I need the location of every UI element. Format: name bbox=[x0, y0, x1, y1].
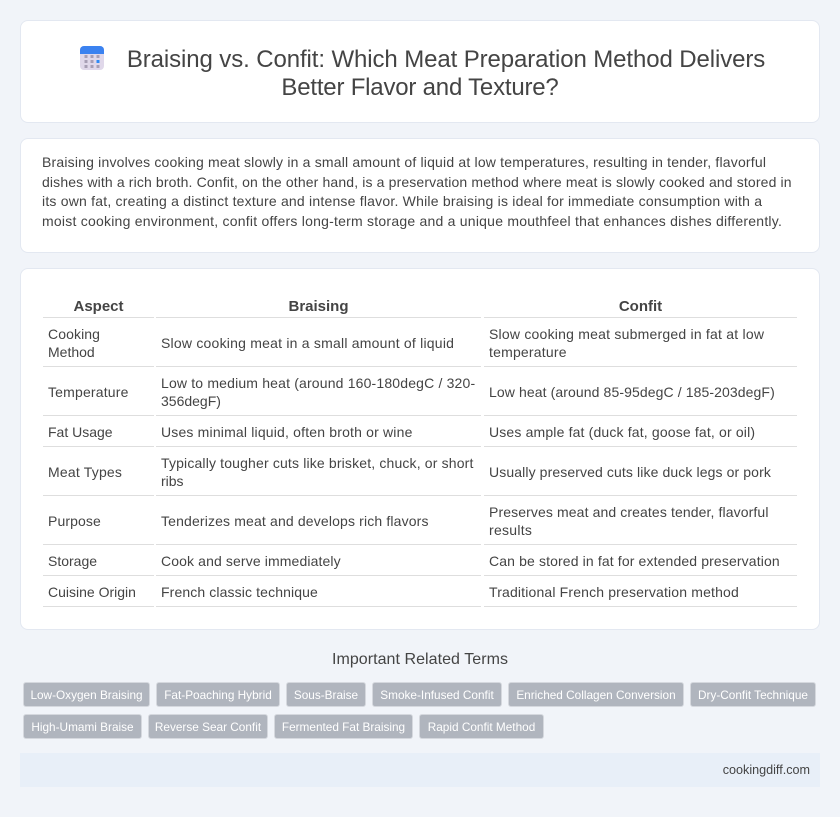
related terms tags: Smoke-Infused Confit bbox=[380, 688, 494, 702]
row: purpose: results bbox=[489, 522, 532, 538]
row: purpose: Purpose bbox=[48, 513, 101, 529]
footer bbox=[20, 753, 820, 787]
intro text: its own fat, creating a distinct texture and intense flavor. While braising is ideal for immediate consumption with a bbox=[42, 193, 762, 209]
row: meat types: ribs bbox=[161, 473, 184, 489]
title: Braising vs. Confit: Which Meat Preparation Method Delivers bbox=[127, 46, 765, 73]
row: cooking method: Slow cooking meat in a small amount of liquid bbox=[161, 335, 454, 351]
row: fat usage: Uses ample fat (duck fat, goose fat, or oil) bbox=[489, 424, 755, 440]
table header: Aspect bbox=[73, 298, 124, 315]
row: temperature: Low heat (around 85-95degC / 185-203degF) bbox=[489, 384, 775, 400]
title bbox=[127, 46, 765, 101]
row: temperature: Low to medium heat (around 160-180degC / 320- bbox=[161, 375, 475, 391]
row: storage: Storage bbox=[48, 553, 97, 569]
related terms tags bbox=[23, 682, 816, 739]
related terms tags: High-Umami Braise bbox=[31, 720, 134, 734]
comparison table bbox=[43, 298, 797, 607]
intro text bbox=[42, 154, 792, 229]
table header: Braising bbox=[288, 298, 348, 315]
related terms tags: Reverse Sear Confit bbox=[155, 720, 261, 734]
row: cuisine origin: Traditional French preservation method bbox=[489, 584, 739, 600]
footer source: cookingdiff.com bbox=[723, 763, 810, 777]
related terms tags: Fermented Fat Braising bbox=[282, 720, 405, 734]
row: storage: Cook and serve immediately bbox=[161, 553, 341, 569]
row: cooking method: Slow cooking meat submerged in fat at low bbox=[489, 326, 764, 342]
row: cooking method: Method bbox=[48, 344, 95, 360]
row: meat types bbox=[48, 455, 771, 489]
row: temperature bbox=[48, 375, 775, 409]
related terms heading: Important Related Terms bbox=[332, 651, 508, 668]
panel: title header bbox=[20, 20, 820, 123]
row: storage bbox=[48, 553, 780, 569]
row: fat usage: Uses minimal liquid, often broth or wine bbox=[161, 424, 413, 440]
row: fat usage: Fat Usage bbox=[48, 424, 113, 440]
related terms tags: Sous-Braise bbox=[294, 688, 358, 702]
icon: calendar bbox=[80, 46, 104, 70]
row: temperature: Temperature bbox=[48, 384, 129, 400]
row: meat types: Usually preserved cuts like duck legs or pork bbox=[489, 464, 771, 480]
related terms tags: Dry-Confit Technique bbox=[698, 688, 808, 702]
panel: comparison table bbox=[20, 268, 820, 630]
intro text: dishes with a rich broth. Confit, on the other hand, is a preservation method where meat is slowly cooked and stored in bbox=[42, 174, 792, 190]
related terms tags: Low-Oxygen Braising bbox=[30, 688, 143, 702]
related terms tags: Fat-Poaching Hybrid bbox=[164, 688, 272, 702]
row: meat types: Meat Types bbox=[48, 464, 122, 480]
row: cuisine origin: French classic technique bbox=[161, 584, 318, 600]
intro text: Braising involves cooking meat slowly in a small amount of liquid at low temperatures, resulting in tender, flavorful bbox=[42, 154, 766, 170]
panel: introduction bbox=[20, 138, 820, 253]
row: cooking method: temperature bbox=[489, 344, 567, 360]
row: purpose: Preserves meat and creates tender, flavorful bbox=[489, 504, 769, 520]
intro text: moist cooking environment, confit offers long-term storage and a unique mouthfeel that enhances dishes differently. bbox=[42, 213, 782, 229]
related terms tags: Rapid Confit Method bbox=[428, 720, 535, 734]
row: storage: Can be stored in fat for extended preservation bbox=[489, 553, 780, 569]
row: cuisine origin: Cuisine Origin bbox=[48, 584, 136, 600]
row: purpose: Tenderizes meat and develops rich flavors bbox=[161, 513, 429, 529]
table header: Confit bbox=[619, 298, 662, 315]
related terms tags: Enriched Collagen Conversion bbox=[516, 688, 676, 702]
row: cooking method: Cooking bbox=[48, 326, 100, 342]
table header bbox=[73, 298, 662, 315]
title: Better Flavor and Texture? bbox=[281, 74, 559, 101]
row: cooking method bbox=[48, 326, 764, 360]
row: purpose bbox=[48, 504, 769, 538]
row: cuisine origin bbox=[48, 584, 739, 600]
row: meat types: Typically tougher cuts like brisket, chuck, or short bbox=[161, 455, 474, 471]
row: fat usage bbox=[48, 424, 755, 440]
row: temperature: 356degF) bbox=[161, 393, 221, 409]
